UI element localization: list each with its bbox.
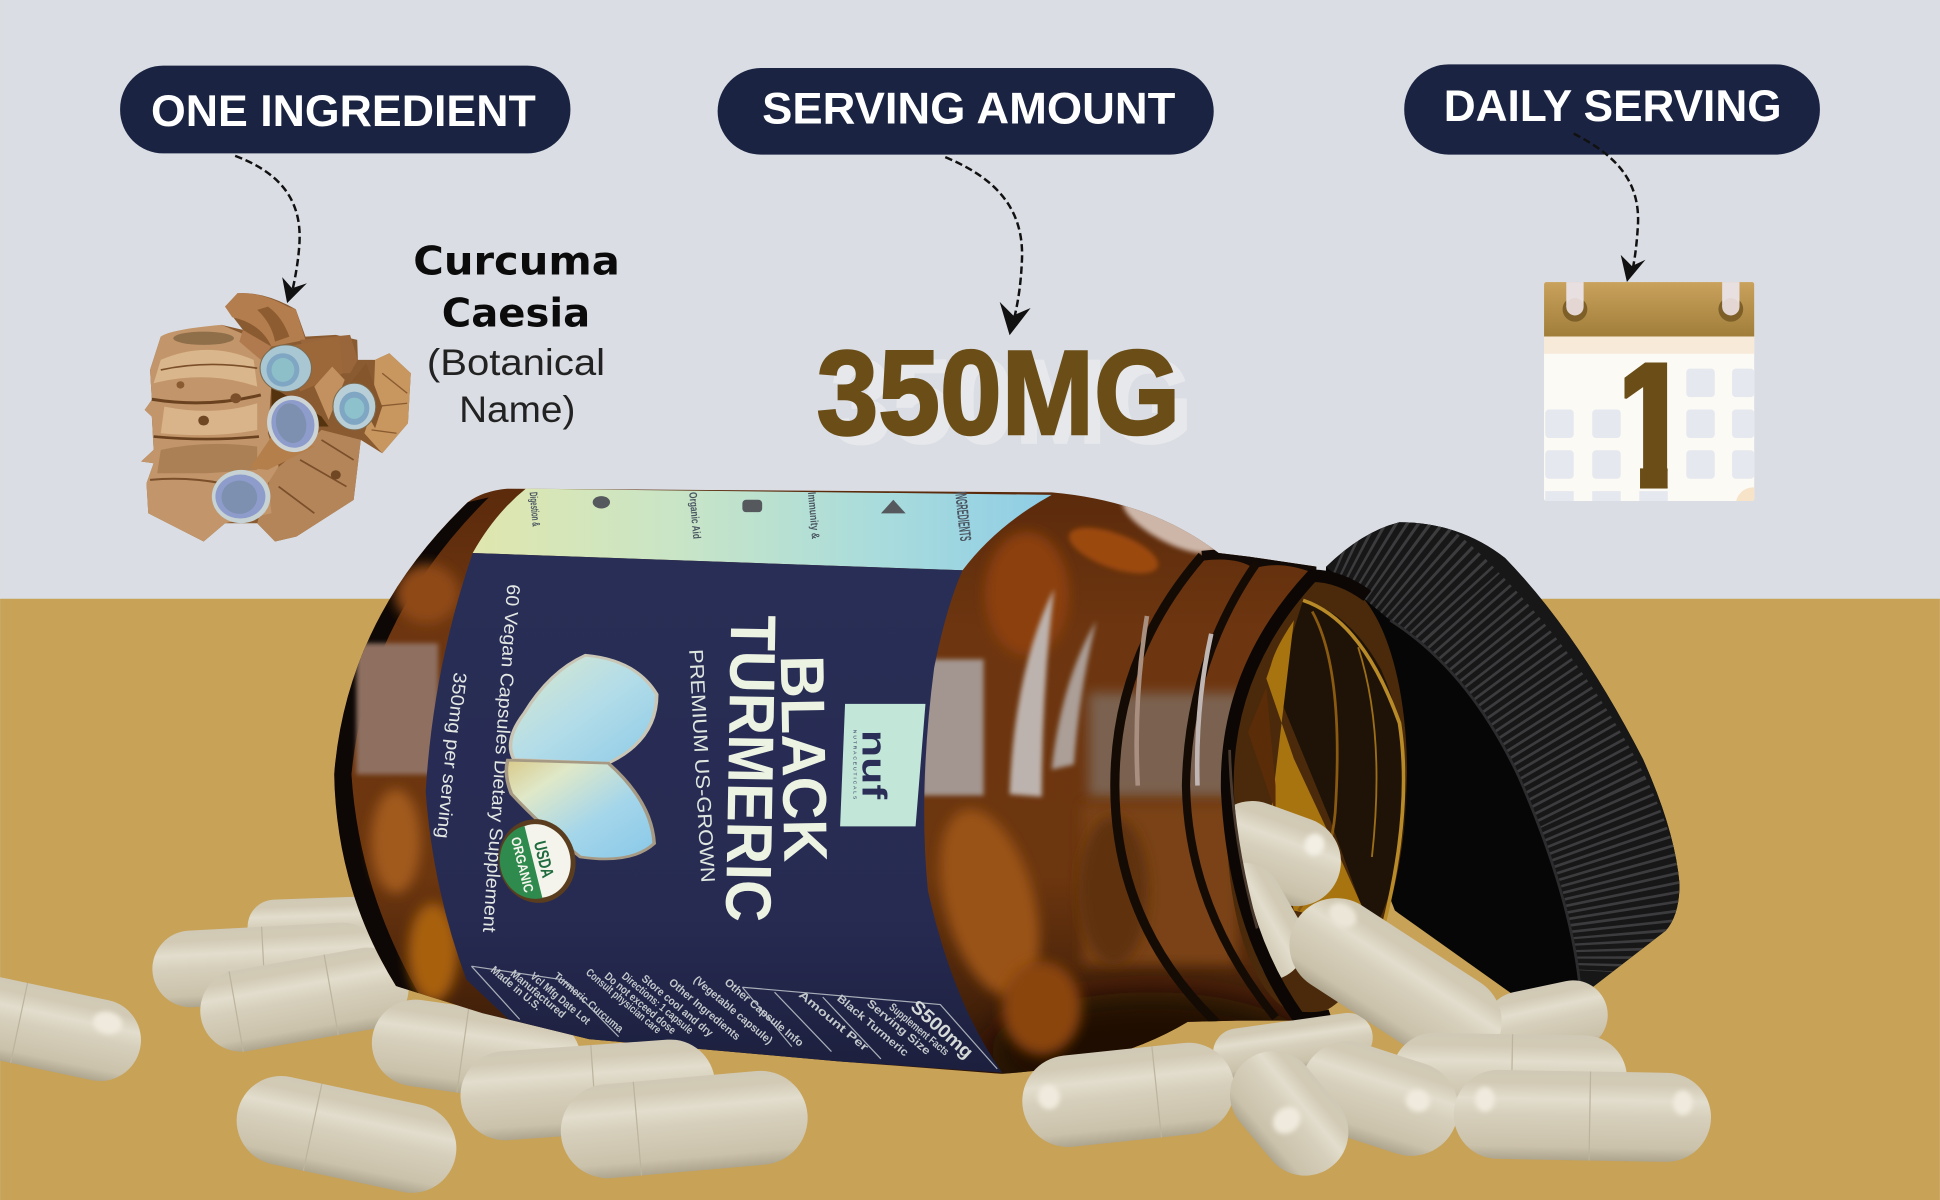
- label: usda organic seal: USDA: [530, 839, 558, 880]
- arrow: serving amount to dose: [945, 157, 1031, 335]
- label: brand patch nuf: [840, 704, 925, 826]
- label: pale gradient top band: INGREDIENTS: [951, 491, 974, 542]
- capsule: pile center diagonal: [1288, 1029, 1470, 1168]
- capsule: pile front right: [1453, 1069, 1712, 1163]
- label: product name: BLACK: [767, 655, 839, 863]
- label: supplement facts block: S500mg: [907, 996, 978, 1063]
- capsule: behind neck pile: [1210, 1010, 1376, 1081]
- label: supplement facts block: Amount Per: [796, 989, 871, 1054]
- label: supplement facts block: (Vegetable capsule): [691, 974, 775, 1047]
- text: botanical name: Curcuma: [413, 239, 620, 285]
- label: turmeric slice artwork: [506, 655, 657, 859]
- label: product name: [712, 615, 839, 923]
- label: top band benefit text: Immunity &: [805, 492, 821, 539]
- label: usda organic seal: ORGANIC: [508, 835, 536, 894]
- arrow: one ingredient to rhizome: [235, 156, 307, 303]
- text: botanical name: Caesia: [442, 291, 590, 337]
- label: supplement facts block: [471, 964, 997, 1069]
- label: supplement facts block: Turmeric Curcuma: [551, 970, 626, 1036]
- capsule: rear right long: [1391, 1032, 1628, 1120]
- bottle mouth: black rim: [1227, 576, 1367, 1018]
- background: upper grey wall: [0, 0, 1940, 599]
- text: botanical name: Name): [459, 388, 575, 430]
- capsule: long spilling from mouth: [1271, 880, 1520, 1087]
- bottle neck and threads: [1115, 555, 1317, 1022]
- label: supplement facts block: Supplement Facts: [886, 1001, 951, 1058]
- capsule: rear stack top: [247, 896, 385, 955]
- icon: calendar showing 1: [1544, 282, 1754, 501]
- label: pale gradient top band: [473, 489, 1052, 570]
- icon: calendar showing 1: 1: [1607, 326, 1696, 527]
- text: botanical name: [413, 239, 620, 430]
- label: supplement facts block: Consult physician care: [583, 967, 663, 1036]
- illustration: curcuma caesia rhizome: [141, 293, 411, 542]
- arrow: daily serving to calendar: [1574, 134, 1645, 282]
- label: supplement facts block: Do not exceed dose: [602, 970, 678, 1037]
- capsule: pile left: [1018, 1038, 1239, 1151]
- big number: 350MG dose: 350MG: [830, 335, 1193, 469]
- label: per serving: 350mg per serving: [433, 671, 471, 840]
- text: botanical name: (Botanical: [427, 341, 605, 383]
- label: supplement facts block: Other Ingredients: [666, 977, 742, 1043]
- pill heading: one ingredient: ONE INGREDIENT: [151, 87, 536, 136]
- label: supplement facts block: Made in U.S.: [488, 964, 543, 1013]
- capsule: pile short upright: [1212, 1033, 1366, 1193]
- label: supplement facts block: Serving Size: [864, 998, 933, 1058]
- capsule: under label center: [458, 1037, 718, 1143]
- label: top band benefit text: Organic Aid: [686, 492, 702, 540]
- pill heading: one ingredient: [120, 66, 570, 153]
- capsule: rear right small: [1479, 974, 1614, 1067]
- bottle cap: ridged black lid: [1321, 522, 1680, 1002]
- capsule: far left: [0, 965, 149, 1089]
- label: supplement facts block: Store cool and dry: [639, 973, 716, 1040]
- label: usda organic seal: [490, 811, 584, 911]
- capsule: foreground left: [228, 1068, 465, 1200]
- pill heading: daily serving: [1404, 64, 1820, 155]
- background: lower gold surface: [0, 599, 1940, 1200]
- label: capsule count: 60 Vegan Capsules Dietary Supplement: [479, 584, 524, 934]
- capsule: resting in bottle mouth: [1234, 801, 1341, 906]
- label: supplement facts block: Vcl Mfg Date Lot: [528, 970, 592, 1027]
- pill heading: daily serving: DAILY SERVING: [1444, 82, 1782, 131]
- label: supplement facts block: Other Capsule Info: [722, 977, 806, 1050]
- capsule: under label left: [366, 994, 587, 1109]
- label: brand patch nuf: NUTRACEUTICALS: [852, 730, 858, 800]
- label: subtitle: PREMIUM US-GROWN: [684, 649, 718, 883]
- capsule: rear stack middle: [150, 921, 383, 1009]
- label: top band icons: [593, 496, 906, 513]
- label: top band benefit text: Digestion &: [527, 492, 542, 527]
- big number: 350MG dose: 350MG: [817, 326, 1180, 460]
- label: product name: TURMERIC: [712, 615, 789, 923]
- pill heading: serving amount: SERVING AMOUNT: [762, 85, 1175, 134]
- bottle: amber glass body: [322, 482, 1324, 1111]
- label: supplement facts block: Black Turmeric: [834, 993, 910, 1059]
- pill heading: serving amount: [718, 68, 1214, 155]
- bottle label: [426, 489, 1052, 1073]
- capsule: sliding through mouth: [1243, 863, 1298, 978]
- label: supplement facts block: Directions: 1 capsule: [619, 970, 695, 1037]
- label: top band benefit text: [527, 492, 821, 540]
- capsule: foreground center: [557, 1067, 812, 1182]
- bottle mouth: opening and interior: [1216, 574, 1418, 1020]
- label: brand patch nuf: nuf: [854, 730, 892, 800]
- label: supplement facts block: Manufactured: [508, 968, 568, 1021]
- capsule: rear stack front: [194, 941, 415, 1058]
- label: navy main panel: [426, 553, 1002, 1073]
